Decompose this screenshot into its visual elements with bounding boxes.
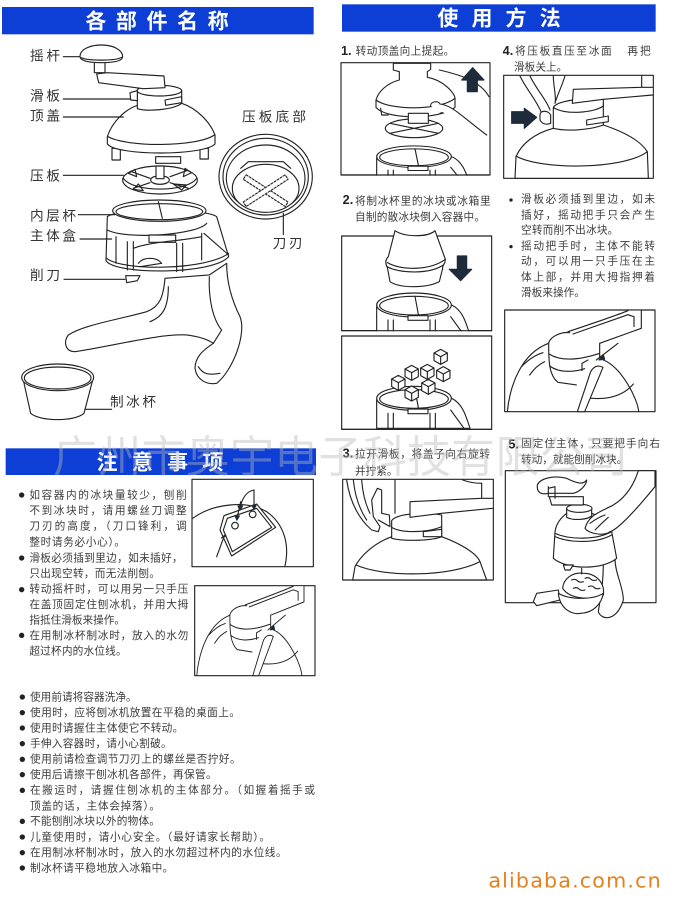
watermark: company name: 广州市奥宇电子科技有限公司 [53, 421, 628, 485]
section: steps 3 and 5 [343, 437, 661, 892]
notes column beside illustrations: 如容器内的冰块量较少，刨削 [29, 489, 187, 502]
step 3 text: 并拧紧。 [355, 464, 398, 477]
labels: part names: 削刀 [30, 268, 60, 283]
step 2b illustration: ice cubes [340, 336, 493, 437]
illustration: thumb pressing slide [505, 310, 655, 412]
bullet notes on slide plate: 滑板来操作。 [521, 286, 585, 299]
notes column beside illustrations: 只出现空转，而无法削刨。 [29, 567, 160, 580]
notes column beside illustrations [19, 489, 189, 658]
bullet notes on slide plate [509, 193, 655, 299]
labels: part names: 主体盒 [30, 227, 76, 243]
step 2 text: 将制冰杯里的冰块或冰箱里 [355, 195, 491, 208]
heading banner: 注意事项 [6, 448, 316, 475]
step 4 text: 再把 [627, 44, 651, 57]
part: crank handle [80, 45, 123, 73]
part: bottom plate with blades [219, 134, 312, 219]
general safety list: 顶盖的话，主体会掉落）。 [30, 799, 160, 812]
general safety list: 在用制冰杯制冰时，放入的水勿超过杯内的水位线。 [30, 846, 287, 859]
step 4 text [503, 44, 651, 73]
step 5 illustration [505, 471, 656, 618]
step 5 text: 转动，就能刨削冰块。 [521, 453, 627, 466]
heading banner: 注意事项: 注意事项 [97, 450, 223, 474]
step 3 illustration [343, 479, 493, 580]
step 3 text [343, 447, 490, 477]
leader lines [63, 57, 283, 409]
illustration: adjusting blade screws [192, 479, 313, 567]
notes column beside illustrations: 在用制冰杯制冰时，放入的水勿 [29, 629, 188, 642]
step 3 text: 3. [343, 447, 353, 461]
exploded diagram of ice shaver [22, 45, 312, 420]
bullet notes on slide plate: 空转而削不出冰块。 [521, 224, 618, 237]
bullet notes on slide plate: 体上部，并用大拇指押着 [521, 270, 655, 283]
general safety list: 使用后请擦干刨冰机各部件，再保管。 [30, 768, 217, 781]
labels: part names: 顶盖 [30, 109, 60, 124]
general safety list: 制冰杯请平稳地放入冰箱中。 [30, 861, 173, 874]
notes column beside illustrations: 在盖顶固定住刨冰机，并用大拇 [29, 598, 189, 611]
heading banner: 使用方法: 使用方法 [437, 7, 561, 31]
notes column beside illustrations: 不到冰块时，请用螺丝刀调整 [29, 504, 187, 517]
general safety list: 使用时，应将刨冰机放置在平稳的桌面上。 [30, 706, 240, 719]
notes column beside illustrations: 刀刃的高度，（刀口锋利，调 [29, 520, 187, 533]
step 4 text: 将压板直压至冰面 [515, 44, 612, 57]
step 2 text: 2. [343, 193, 353, 207]
notes column beside illustrations: 超过杯内的水位线。 [29, 645, 127, 658]
general safety list: 使用时请握住主体使它不转动。 [30, 721, 183, 734]
section: 使用方法 [340, 4, 656, 437]
labels: part names: 压板 [30, 168, 60, 183]
general safety list [20, 690, 315, 874]
part: press plate [123, 166, 197, 194]
general safety list: 在搬运时，请握住刨冰机的主体部分。（如握着摇手或 [30, 784, 315, 797]
step 1 illustration [340, 63, 493, 186]
part: stand [126, 276, 222, 374]
step 2 illustration [340, 231, 493, 341]
labels: part names: 压板底部 [242, 110, 306, 125]
labels: part names: 内层杯 [30, 208, 76, 223]
labels: part names: 制冰杯 [110, 395, 156, 410]
step 4 text: 4. [503, 44, 513, 58]
part: top lid with slide [97, 73, 215, 163]
general safety list: 不能刨削冰块以外的物体。 [30, 815, 160, 828]
labels: part names [30, 48, 306, 410]
section: 各部件名称 [2, 7, 314, 420]
step 2 text: 自制的散冰块倒入容器中。 [355, 210, 485, 223]
step 1 text: 转动顶盖向上提起。 [356, 44, 454, 57]
watermark source mark: alibaba.com.cn [488, 868, 661, 892]
notes column beside illustrations: 滑板必须插到里边，如未插好， [29, 552, 183, 565]
part: ice cup [22, 364, 94, 420]
general safety list: 使用前请将容器洗净。 [30, 690, 137, 703]
step 4 illustration [504, 75, 653, 178]
step 4 text: 滑板关上。 [514, 60, 567, 73]
step 3 text: 拉开滑板，将盖子向右旋转 [355, 448, 490, 461]
section: 注意事项 [6, 448, 316, 874]
general safety list: 手伸入容器时，请小心割破。 [30, 737, 172, 750]
notes column beside illustrations: 指抵住滑板来操作。 [29, 614, 125, 627]
step 5 text: 固定住主体，只要把手向右 [521, 437, 660, 450]
notes column beside illustrations: 整时请务必小心）。 [29, 535, 125, 548]
part: body case and inner cup [66, 200, 242, 384]
illustration: thumb on slide [195, 586, 315, 676]
labels: part names: 摇杆 [30, 48, 60, 63]
general safety list: 使用前请检查调节刀刃上的螺丝是否拧好。 [30, 752, 241, 765]
labels: part names: 滑板 [30, 87, 60, 103]
step 5 text: 5. [508, 437, 519, 451]
notes column beside illustrations: 转动摇杆时，可以用另一只手压 [29, 583, 189, 596]
heading banner: 各部件名称: 各部件名称 [85, 9, 229, 33]
step 2 text [343, 193, 491, 223]
labels: part names: 刀刃 [273, 236, 303, 251]
heading banner: 使用方法 [342, 4, 656, 32]
step 1 text: 1. [341, 44, 352, 58]
bullet notes on slide plate: 摇动把手时，主体不能转 [521, 239, 655, 252]
bullet notes on slide plate: 动，可以用一只手压在主 [521, 255, 655, 268]
general safety list: 儿童使用时，请小心安全。（最好请家长帮助）。 [30, 830, 270, 843]
bullet notes on slide plate: 插好，摇动把手只会产生 [521, 208, 655, 221]
heading banner: 各部件名称 [2, 7, 314, 34]
bullet notes on slide plate: 滑板必须插到里边，如未 [521, 193, 655, 206]
step 5 text [508, 437, 660, 466]
